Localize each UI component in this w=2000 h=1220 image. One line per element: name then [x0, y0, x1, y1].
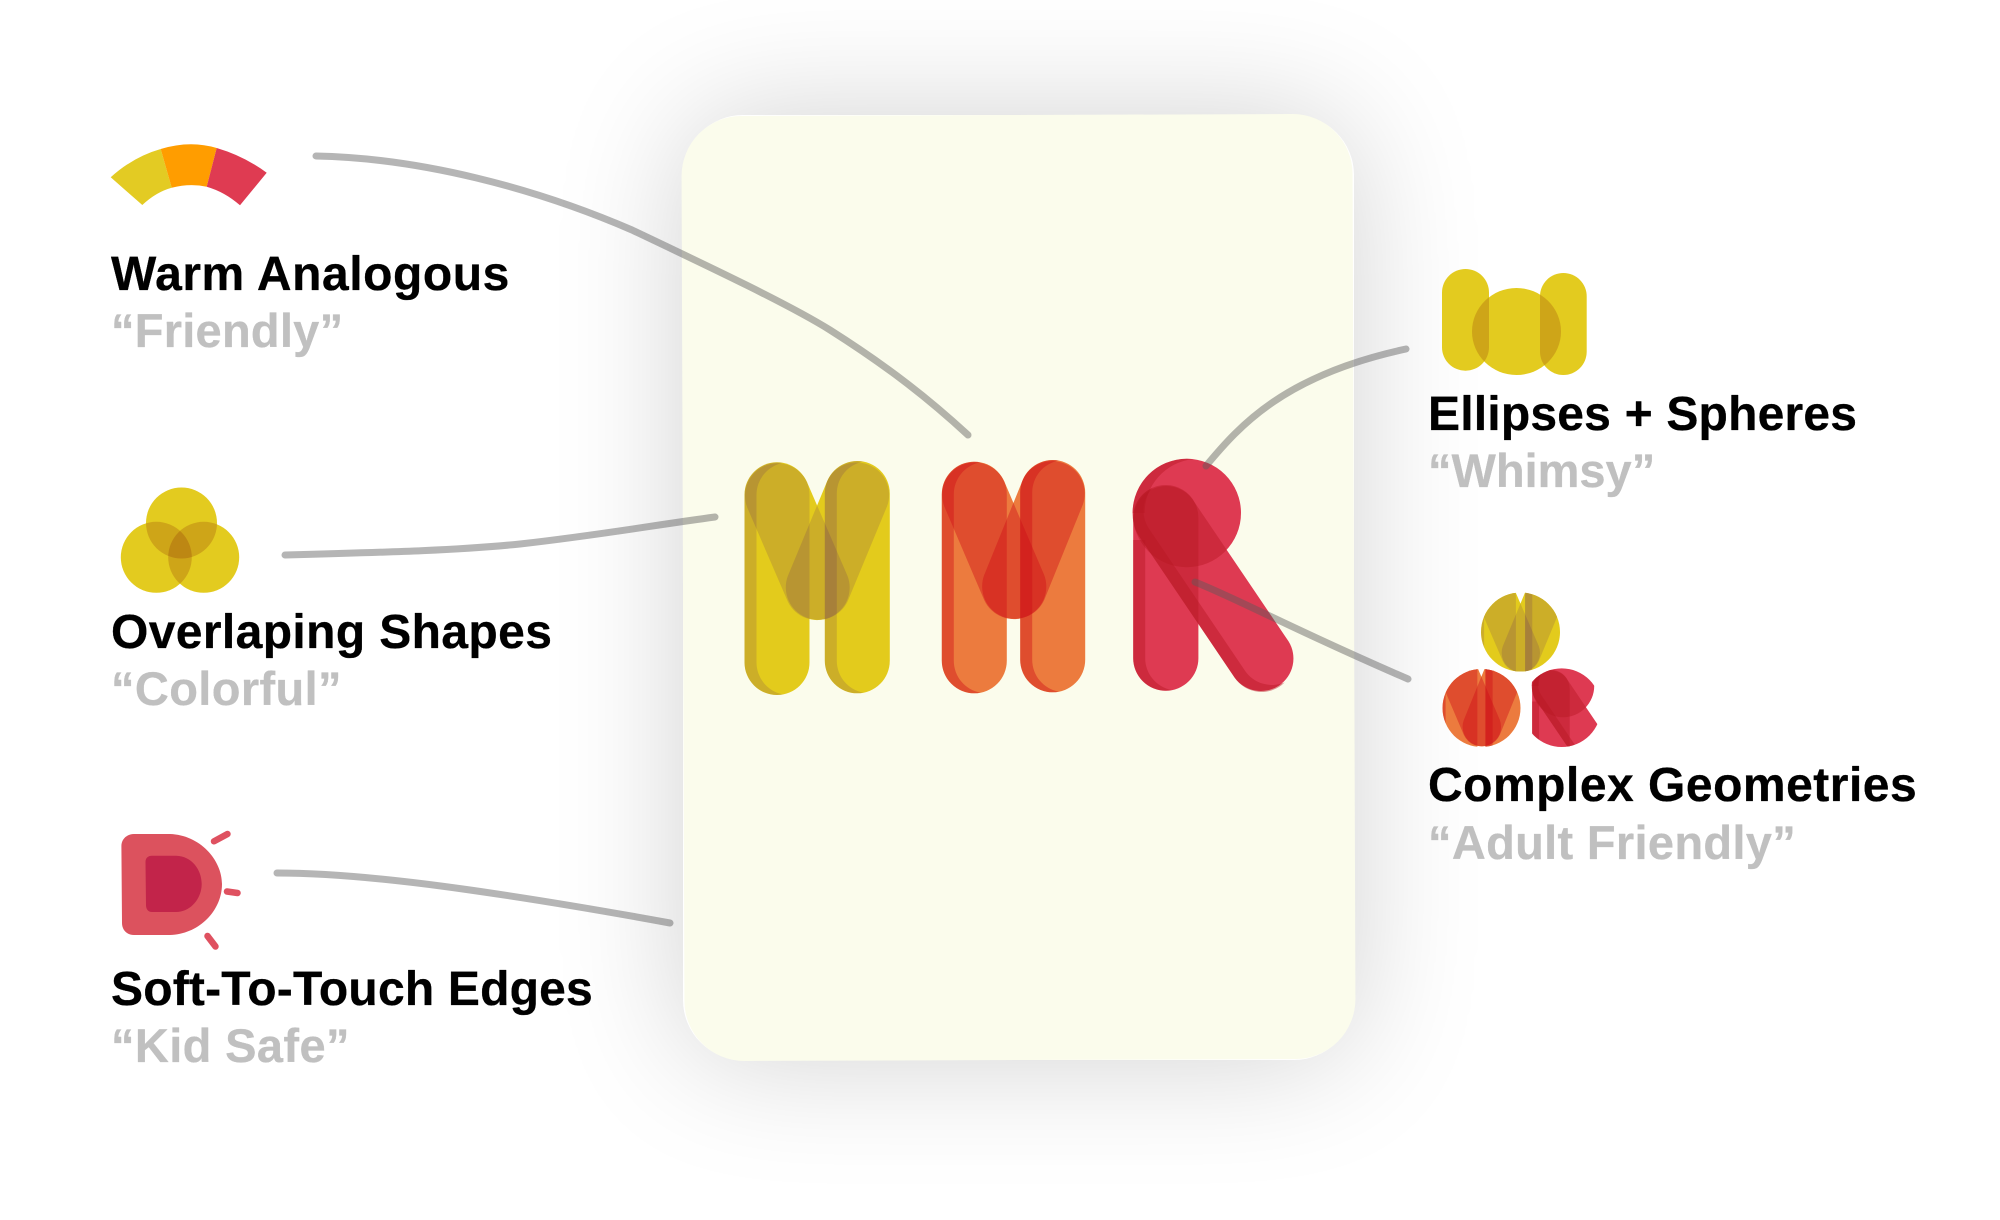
- icon: complex geometries: [1442, 592, 1598, 747]
- connector line: soft edges: [277, 873, 670, 923]
- letter R red: [1133, 459, 1293, 692]
- panel: logo card: [681, 114, 1355, 1061]
- quote: whimsy: “Whimsy”: [1428, 444, 1655, 497]
- connector line: complex geometries: [1195, 582, 1408, 679]
- heading: soft-to-touch edges: Soft-To-Touch Edges: [111, 963, 593, 1016]
- icon: overlapping circles: [121, 488, 239, 593]
- heading: overlaping shapes: Overlaping Shapes: [111, 606, 552, 659]
- connector line: ellipses and spheres: [1206, 349, 1406, 466]
- quote: adult friendly: “Adult Friendly”: [1428, 816, 1796, 869]
- heading: complex geometries: Complex Geometries: [1428, 759, 1917, 812]
- heading: warm analogous: Warm Analogous: [111, 248, 510, 301]
- heading: ellipses + spheres: Ellipses + Spheres: [1428, 388, 1857, 441]
- quote: friendly: “Friendly”: [111, 304, 343, 357]
- icon: ellipses and spheres: [1442, 269, 1587, 375]
- infographic page: [110, 61, 1915, 1114]
- quote: colorful: “Colorful”: [111, 662, 342, 715]
- card shadow: [682, 115, 1354, 1060]
- icon: soft rounded D: [121, 834, 238, 946]
- letter M orange: [942, 460, 1085, 693]
- connector line: overlapping shapes: [285, 517, 715, 555]
- letter M yellow: [744, 461, 890, 695]
- connector line: warm analogous: [316, 156, 968, 435]
- icon: warm colour arc: [111, 144, 267, 205]
- quote: kid safe: “Kid Safe”: [111, 1019, 350, 1072]
